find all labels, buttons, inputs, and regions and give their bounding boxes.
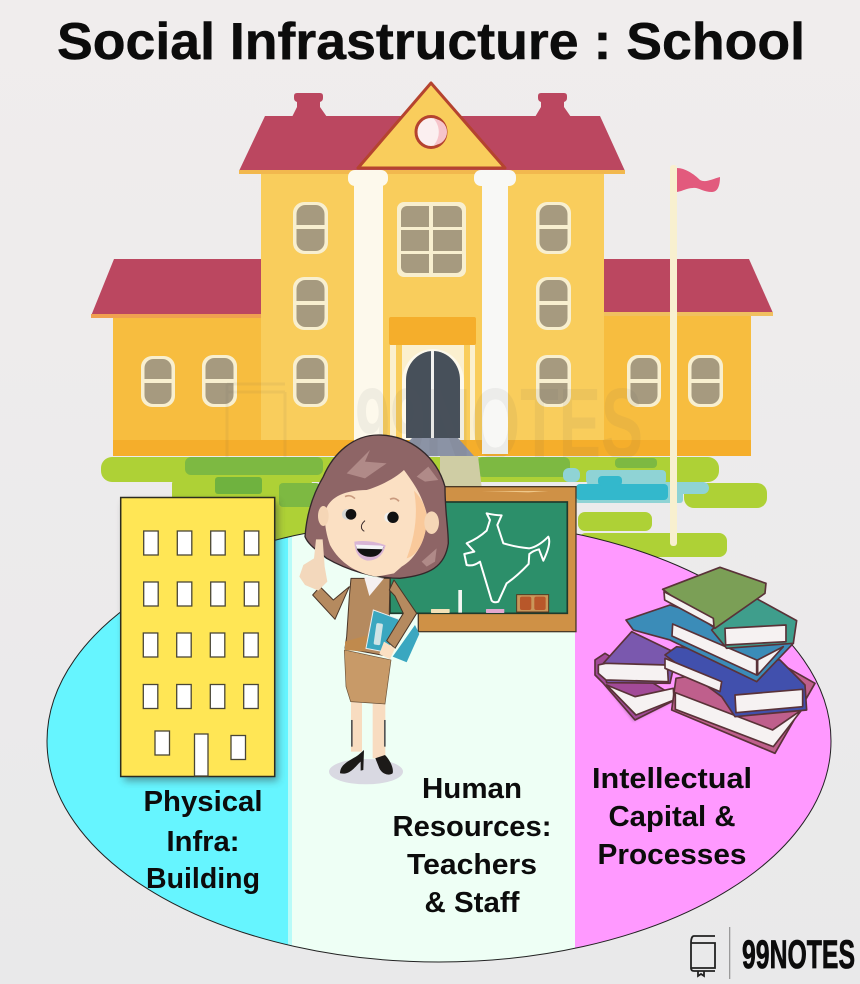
label: human resources (392, 773, 552, 919)
entrance steps (396, 438, 474, 456)
lawn (101, 456, 767, 557)
orange base strip (113, 440, 751, 456)
hair (305, 435, 448, 578)
school building illustration (91, 83, 773, 456)
ears (318, 506, 439, 534)
hair highlights (347, 450, 438, 567)
books in hand (366, 610, 419, 662)
shoes (340, 750, 393, 775)
forearm (387, 580, 417, 648)
left wing (91, 259, 263, 456)
main block (261, 172, 604, 456)
wing windows (141, 355, 723, 407)
jacket and arms (313, 577, 390, 657)
watermark: 99NOTES (355, 368, 643, 480)
title: Social Infrastructure : School (57, 13, 805, 71)
label: intellectual capital: Capital & (608, 801, 736, 833)
garden path (440, 456, 482, 490)
flag and pole (670, 165, 720, 546)
purple book (598, 632, 677, 683)
building windows (143, 531, 259, 776)
chimneys (292, 93, 571, 117)
center window (397, 202, 466, 277)
columns (348, 170, 516, 456)
chalk and eraser (431, 590, 549, 613)
eyes and brows (342, 496, 399, 531)
yellow building icon (121, 498, 278, 781)
label: physical infra: Physical (144, 786, 262, 818)
label: intellectual capital: Processes (598, 839, 746, 871)
entrance door (389, 317, 476, 440)
label: physical infra: Building (146, 863, 260, 895)
three-part ellipse (40, 510, 835, 970)
pond (563, 468, 709, 503)
watermark (227, 368, 643, 480)
blue book (626, 605, 793, 682)
label: intellectual capital (592, 763, 752, 871)
India map outline (464, 513, 549, 602)
indigo book (665, 647, 807, 717)
label: physical infra: Infra: (166, 826, 240, 858)
face (325, 470, 427, 577)
pink book bottom left (595, 653, 675, 720)
mouth (354, 541, 386, 561)
label: human resources: Teachers (407, 849, 537, 881)
label: physical infra (144, 786, 262, 895)
skirt (344, 650, 391, 704)
upper windows (293, 202, 571, 407)
label: human resources: & Staff (424, 887, 520, 919)
main roof (239, 116, 625, 171)
label: intellectual capital: Intellectual (592, 763, 752, 795)
logo: 99notes (691, 927, 855, 979)
legs (351, 702, 386, 758)
pink book bottom right (672, 662, 815, 753)
label: human resources: Human (422, 773, 522, 805)
teal book (712, 595, 797, 648)
ground shadow (329, 759, 403, 784)
label: human resources: Resources: (392, 811, 552, 843)
raised hand (299, 539, 327, 591)
stack of books (595, 567, 815, 753)
oval window (416, 116, 447, 148)
right wing (602, 259, 773, 456)
pediment (358, 83, 505, 168)
chalkboard with India map (390, 487, 576, 632)
teacher figure (299, 435, 448, 784)
icon: book (691, 936, 715, 976)
green book (663, 567, 766, 628)
